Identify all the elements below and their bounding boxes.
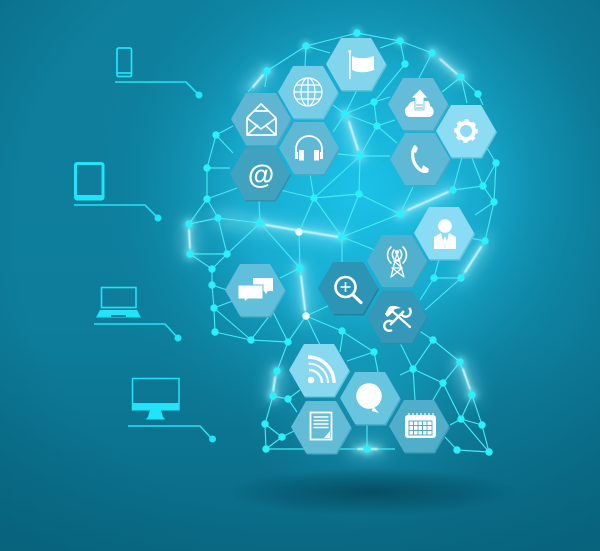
network glow halos [189,58,483,449]
device: laptop with connector [94,288,182,342]
hexagon: cloud upload [388,78,449,132]
hexagon: globe [278,66,339,120]
bright light streaks [189,59,481,449]
device: tablet with connector [74,164,162,222]
hexagon: magnifier [318,262,379,316]
hexagon: speech bubble [340,372,401,426]
hexagon: document [291,401,352,454]
wide soft glow along head edge [189,53,485,449]
hexagon: tools [367,291,428,344]
hexagon: at sign: @ [248,160,274,190]
hexagon: flag [326,38,387,92]
hexagon: chat bubbles [225,264,286,318]
network links [189,33,496,452]
hexagon: radio tower [367,235,428,288]
hexagon: phone handset [390,133,451,186]
hexagon: at sign [230,148,291,202]
hexagon: headphones [279,122,340,176]
device: desktop monitor with connector [128,378,216,442]
hexagon: gear [436,105,497,158]
head-shaped network [189,33,496,452]
ground shadow under head [227,468,517,516]
hexagon: calendar [389,400,450,454]
device: smartphone with connector [115,48,202,98]
soft halos behind nodes [189,33,472,449]
hexagon: person [414,207,475,260]
hexagon: rss [289,344,350,398]
bright nodes [299,232,306,316]
hexagon: envelope [231,93,292,146]
network nodes [189,33,496,452]
